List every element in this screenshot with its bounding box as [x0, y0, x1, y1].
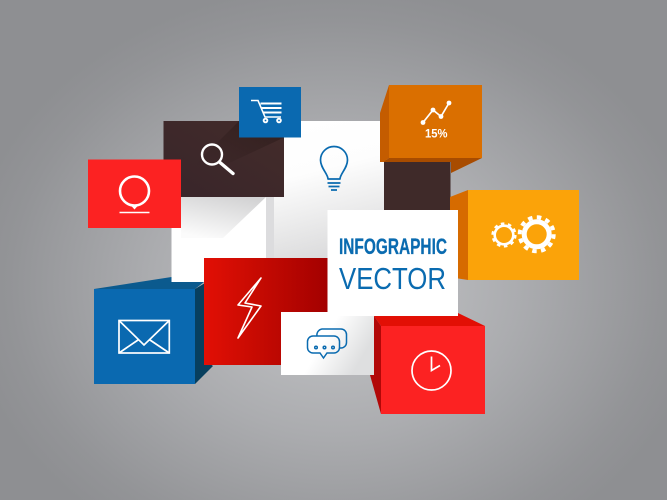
icon: shopping cart [251, 100, 282, 123]
panel: red clock block [370, 313, 485, 414]
panel: dark red lightning block [204, 258, 328, 365]
panel: orange chart block [380, 85, 482, 173]
text: 15%: 15% [425, 128, 448, 140]
icon: speech bubbles [308, 329, 346, 358]
panel: white lightbulb block [266, 121, 384, 262]
panel: blue mail block [94, 277, 213, 384]
panel: white chat block [281, 312, 374, 375]
icon: line chart [421, 101, 451, 125]
icon: clock [412, 351, 451, 390]
panel: dark middle block [384, 160, 450, 212]
icon: gears [492, 217, 554, 251]
panel: red location block [88, 160, 181, 228]
icon: lightbulb [320, 146, 348, 190]
icon: envelope [119, 320, 169, 353]
panel: white lower-left block [172, 197, 266, 282]
panel: blue cart block [239, 87, 301, 138]
icon: magnifier [202, 144, 233, 174]
panel: dark search block [164, 121, 284, 197]
title: INFOGRAPHIC: INFOGRAPHIC [339, 234, 447, 259]
panel: title card [328, 210, 458, 316]
icon: location pin [120, 176, 150, 212]
title: VECTOR: VECTOR [339, 261, 446, 296]
icon: lightning bolt [238, 278, 261, 338]
panel: amber gears block [450, 190, 579, 280]
